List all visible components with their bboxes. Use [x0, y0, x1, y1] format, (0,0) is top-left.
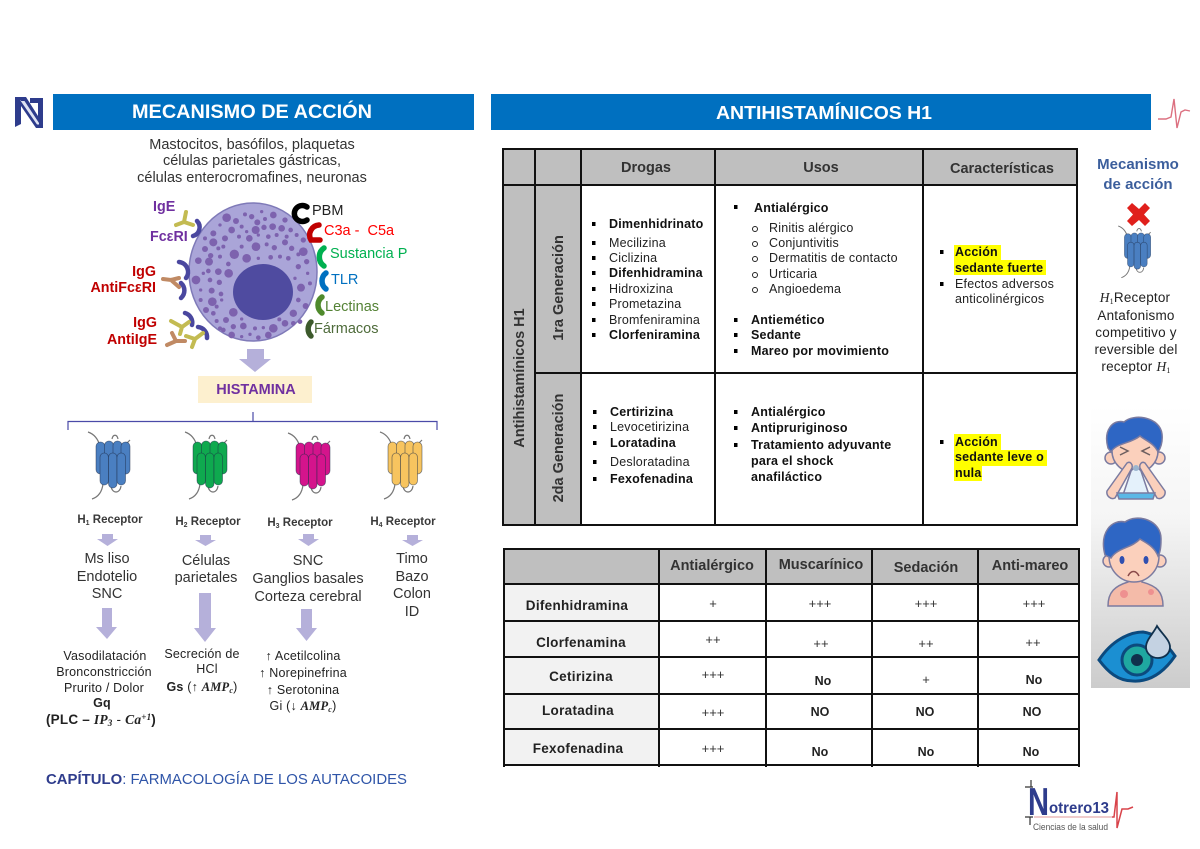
text: H1 tissues: SNC	[92, 586, 122, 602]
text: H2 effects: HCl	[196, 662, 218, 676]
characteristics: second generation: nula	[955, 466, 982, 480]
comparison values: +	[922, 672, 930, 687]
text: H3 tissues: Corteza cerebral	[254, 589, 362, 605]
comparison values: ++	[705, 632, 721, 647]
comparison values: +++	[915, 596, 937, 611]
labels: left receptors: IgG	[132, 264, 156, 280]
logo: Notrero13	[1025, 780, 1133, 833]
comparison headers: Muscarínico	[779, 557, 863, 573]
uses: first generation: Urticaria	[769, 267, 817, 281]
uses: second generation: para el shock	[751, 454, 834, 468]
comparison values: ++	[813, 636, 829, 651]
text: H1 effects: Prurito / Dolor	[64, 681, 144, 695]
text: H2 effects	[164, 647, 240, 695]
uses: first generation: Antiemético	[751, 313, 825, 327]
comparison values	[702, 596, 1045, 759]
icon: H1 receptor	[88, 432, 130, 499]
heading: mecanismo de acción	[53, 94, 474, 130]
text: H2 effects: Secreción de	[164, 647, 240, 661]
heading: mecanismo de acción sidebar	[1097, 156, 1179, 193]
icon: blocked H1 receptor	[1118, 226, 1151, 278]
labels: receptor names: 2	[184, 522, 188, 529]
text: cell types: células parietales gástricas,	[163, 153, 341, 169]
uses: first generation: Rinitis alérgico	[769, 221, 853, 235]
comparison row labels	[526, 598, 628, 756]
comparison row labels: Clorfenamina	[536, 635, 626, 650]
text: H3 effects: c	[328, 705, 332, 714]
text: H4 tissues	[393, 551, 431, 620]
text: H3 tissues: SNC	[293, 553, 323, 569]
text: mechanism description: 1	[1166, 366, 1171, 375]
comparison values: NO	[811, 705, 830, 719]
drugs: second generation: Levocetirizina	[610, 420, 689, 434]
labels: receptor names: H	[77, 514, 86, 526]
text: H2 effects: c	[229, 686, 233, 695]
comparison headers: Anti-mareo	[992, 558, 1068, 574]
vertical row labels: Antihistamínicos H1	[512, 308, 528, 448]
text: H4 tissues: ID	[405, 604, 419, 620]
labels: receptor names: H	[175, 516, 184, 528]
comparison headers	[670, 557, 1068, 576]
text: H3 tissues	[252, 553, 364, 605]
drugs: first generation: Dimenhidrinato	[609, 217, 704, 231]
comparison row labels: Cetirizina	[549, 669, 613, 684]
text: H1 effects: Gq	[93, 696, 111, 710]
text: mechanism description: H	[1099, 290, 1111, 305]
text: H3 effects: ↑ Norepinefrina	[259, 666, 347, 680]
text: cell types	[137, 137, 367, 186]
uses: first generation: Dermatitis de contacto	[769, 251, 898, 265]
comparison values: No	[815, 674, 832, 688]
drugs: first generation: Bromfeniramina	[609, 313, 700, 327]
text: mechanism description: Receptor	[1114, 290, 1171, 305]
uses: second generation: Antialérgico	[751, 405, 826, 419]
text: cell types: células enterocromafines, neuronas	[137, 170, 367, 186]
characteristics: first generation: anticolinérgicos	[955, 292, 1044, 306]
characteristics: first generation	[940, 245, 1054, 306]
comparison values: No	[812, 745, 829, 759]
labels: receptor names: Receptor	[188, 516, 241, 528]
drugs: first generation: Clorfeniramina	[609, 328, 701, 342]
comparison values: No	[1023, 745, 1040, 759]
arrows: large effect arrows	[96, 593, 317, 642]
comparison values: +++	[702, 667, 724, 682]
drugs: first generation: Difenhidramina	[609, 266, 704, 280]
table: drug classification	[503, 149, 1077, 525]
labels: right receptors: C3a - C5a	[324, 223, 395, 239]
vertical row labels: 1ra Generación	[551, 235, 567, 341]
text: H3 effects	[259, 649, 347, 714]
text: H2 tissues	[175, 553, 237, 586]
uses: first generation: Angioedema	[769, 282, 841, 296]
labels: receptor names: H	[267, 517, 276, 529]
comparison values: No	[918, 745, 935, 759]
vertical row labels	[512, 235, 567, 502]
table headers	[621, 160, 1054, 177]
text: H1 effects: Bronconstricción	[56, 665, 152, 679]
comparison row labels: Fexofenadina	[533, 741, 623, 756]
drugs: first generation: Mecilizina	[609, 236, 666, 250]
characteristics: first generation: Acción	[955, 245, 998, 259]
uses: first generation: Sedante	[751, 328, 801, 342]
labels: right receptors: Sustancia P	[330, 246, 407, 262]
drugs: second generation	[593, 405, 694, 486]
drugs: second generation: Desloratadina	[610, 455, 690, 469]
text: H1 effects: (PLC – IP	[46, 712, 108, 727]
uses: first generation: Conjuntivitis	[769, 236, 839, 250]
drugs: first generation	[592, 217, 704, 342]
comparison values: +++	[1023, 596, 1045, 611]
characteristics: second generation	[940, 434, 1047, 481]
text: H3 effects: ↑ Serotonina	[267, 683, 339, 697]
comparison values: +++	[809, 596, 831, 611]
table headers: Características	[950, 161, 1054, 177]
text: cell types: Mastocitos, basófilos, plaquetas	[149, 137, 355, 153]
logo: Notrero13: N	[1028, 781, 1049, 824]
vertical row labels: 2da Generación	[551, 394, 567, 502]
arrows: small receptor arrows	[97, 534, 423, 546]
characteristics: first generation: Efectos adversos	[955, 277, 1054, 291]
logo: Notrero13: Ciencias de la salud	[1033, 822, 1108, 833]
comparison headers: Sedación	[894, 560, 958, 576]
heading: mecanismo de acción sidebar: de acción	[1103, 176, 1173, 193]
icon: red cross	[1127, 203, 1150, 226]
labels: receptor names: Receptor	[383, 516, 436, 528]
receptors and antibodies: left side	[163, 212, 207, 347]
labels: right receptors: Fármacos	[314, 321, 378, 337]
labels: right receptors	[312, 203, 407, 337]
labels: receptor names: 4	[379, 522, 383, 529]
labels: left receptors: AntiFcεRI	[90, 280, 156, 296]
arrow: cell to histamine	[239, 349, 271, 372]
icon: boy with tissue	[1105, 417, 1165, 499]
receptors: right side	[294, 206, 326, 336]
text: H1 effects: 3	[107, 718, 113, 728]
heading: mecanismo de acción: MECANISMO DE ACCIÓN	[132, 101, 372, 123]
labels: left receptors: IgE	[153, 199, 175, 215]
panel: symptoms icons	[1091, 405, 1190, 688]
uses: first generation: Mareo por movimiento	[751, 344, 889, 358]
comparison values: +	[709, 596, 717, 611]
text: H4 tissues: Colon	[393, 586, 431, 602]
text: H1 tissues: Ms liso	[84, 551, 130, 567]
text: H3 effects: Gi (↓ AMP	[270, 699, 328, 713]
text: H3 effects: )	[332, 699, 336, 713]
labels: receptor names: Receptor	[280, 517, 333, 529]
label: histamina: HISTAMINA	[216, 382, 296, 398]
text: H1 effects: -	[113, 712, 125, 727]
comparison headers: Antialérgico	[670, 558, 754, 574]
labels: receptor names: 1	[86, 520, 90, 527]
labels: right receptors: Lectinas	[325, 299, 379, 315]
drugs: first generation: Ciclizina	[609, 251, 657, 265]
text: H2 tissues: parietales	[175, 570, 237, 586]
uses: second generation	[734, 405, 891, 484]
text: H2 effects: )	[233, 680, 238, 694]
comparison values: +++	[702, 705, 724, 720]
text: H1 tissues	[77, 551, 137, 602]
uses: second generation: Antipruriginoso	[751, 421, 848, 435]
text: mechanism description: reversible del	[1094, 342, 1178, 357]
labels: receptor names	[77, 514, 436, 530]
drugs: second generation: Fexofenadina	[610, 472, 694, 486]
uses: first generation: Antialérgico	[754, 201, 829, 215]
logo: Notrero13: otrero13	[1049, 800, 1109, 817]
text: H3 effects: ↑ Acetilcolina	[265, 649, 341, 663]
label: histamina	[198, 376, 312, 403]
table headers: Drogas	[621, 160, 671, 176]
labels: left receptors: AntiIgE	[107, 332, 157, 348]
drugs: first generation: Prometazina	[609, 297, 681, 311]
icon: sad boy with rash	[1103, 518, 1166, 606]
drugs: second generation: Certirizina	[610, 405, 674, 419]
text: H1 tissues: Endotelio	[77, 569, 137, 585]
labels: left receptors: FcεRI	[150, 229, 188, 245]
text: H1 effects: Vasodilatación	[63, 649, 147, 663]
characteristics: second generation: Acción	[955, 435, 998, 449]
text: H1 effects: Ca	[125, 712, 141, 727]
icon: H4 receptor	[380, 432, 422, 499]
table: receptor effects comparison	[504, 548, 1079, 767]
heading: mecanismo de acción sidebar: Mecanismo	[1097, 156, 1179, 173]
text: mechanism description: Antafonismo	[1097, 308, 1175, 323]
text: H2 effects: Gs (↑ AMP	[166, 680, 229, 694]
icon: H2 receptor	[185, 432, 227, 499]
characteristics: second generation: sedante leve o	[955, 450, 1044, 464]
text: H4 tissues: Bazo	[395, 569, 429, 585]
labels: left receptors	[90, 199, 188, 348]
comparison row labels: Difenhidramina	[526, 598, 628, 613]
comparison values: No	[1026, 673, 1043, 687]
comparison values: NO	[916, 705, 935, 719]
labels: receptor names: 3	[276, 523, 280, 530]
text: mechanism description: competitivo y	[1095, 325, 1177, 340]
text: chapter: CAPÍTULO: FARMACOLOGÍA DE LOS AUTACOIDES	[46, 771, 407, 788]
bracket: histamine receptors	[68, 412, 437, 430]
heading: antihistamínicos H1: ANTIHISTAMÍNICOS H1	[716, 102, 932, 123]
text: H4 tissues: Timo	[396, 551, 428, 567]
text: H2 tissues: Células	[182, 553, 230, 569]
text: H3 tissues: Ganglios basales	[252, 571, 364, 587]
text: mechanism description: 1	[1110, 297, 1114, 306]
characteristics: first generation: sedante fuerte	[955, 261, 1043, 275]
comparison row labels: Loratadina	[542, 703, 614, 718]
text: H1 effects	[46, 649, 156, 728]
text: H1 effects: +1	[141, 712, 151, 722]
diagram: mast cell	[189, 203, 317, 341]
labels: receptor names: H	[370, 516, 379, 528]
icon: N logo	[15, 97, 43, 128]
icon: watery eye	[1099, 626, 1175, 681]
uses: second generation: Tratamiento adyuvante	[751, 438, 891, 452]
drugs: first generation: Hidroxizina	[609, 282, 673, 296]
comparison values: NO	[1023, 705, 1042, 719]
heading: antihistamínicos H1	[491, 94, 1151, 130]
labels: right receptors: PBM	[312, 203, 343, 219]
text: mechanism description	[1094, 290, 1178, 375]
text: H1 effects: )	[151, 712, 156, 727]
drugs: second generation: Loratadina	[610, 436, 677, 450]
comparison values: +++	[702, 741, 724, 756]
icon: ECG pulse top right	[1158, 99, 1190, 128]
table headers: Usos	[803, 160, 839, 176]
labels: receptor names: Receptor	[90, 514, 143, 526]
text: mechanism description: receptor H	[1101, 359, 1166, 374]
labels: right receptors: TLR	[331, 272, 358, 288]
comparison values: ++	[918, 636, 934, 651]
uses: second generation: anafiláctico	[751, 470, 822, 484]
uses: first generation	[734, 201, 898, 358]
comparison values: ++	[1025, 635, 1041, 650]
icon: H3 receptor	[288, 433, 330, 500]
labels: left receptors: IgG	[133, 315, 157, 331]
